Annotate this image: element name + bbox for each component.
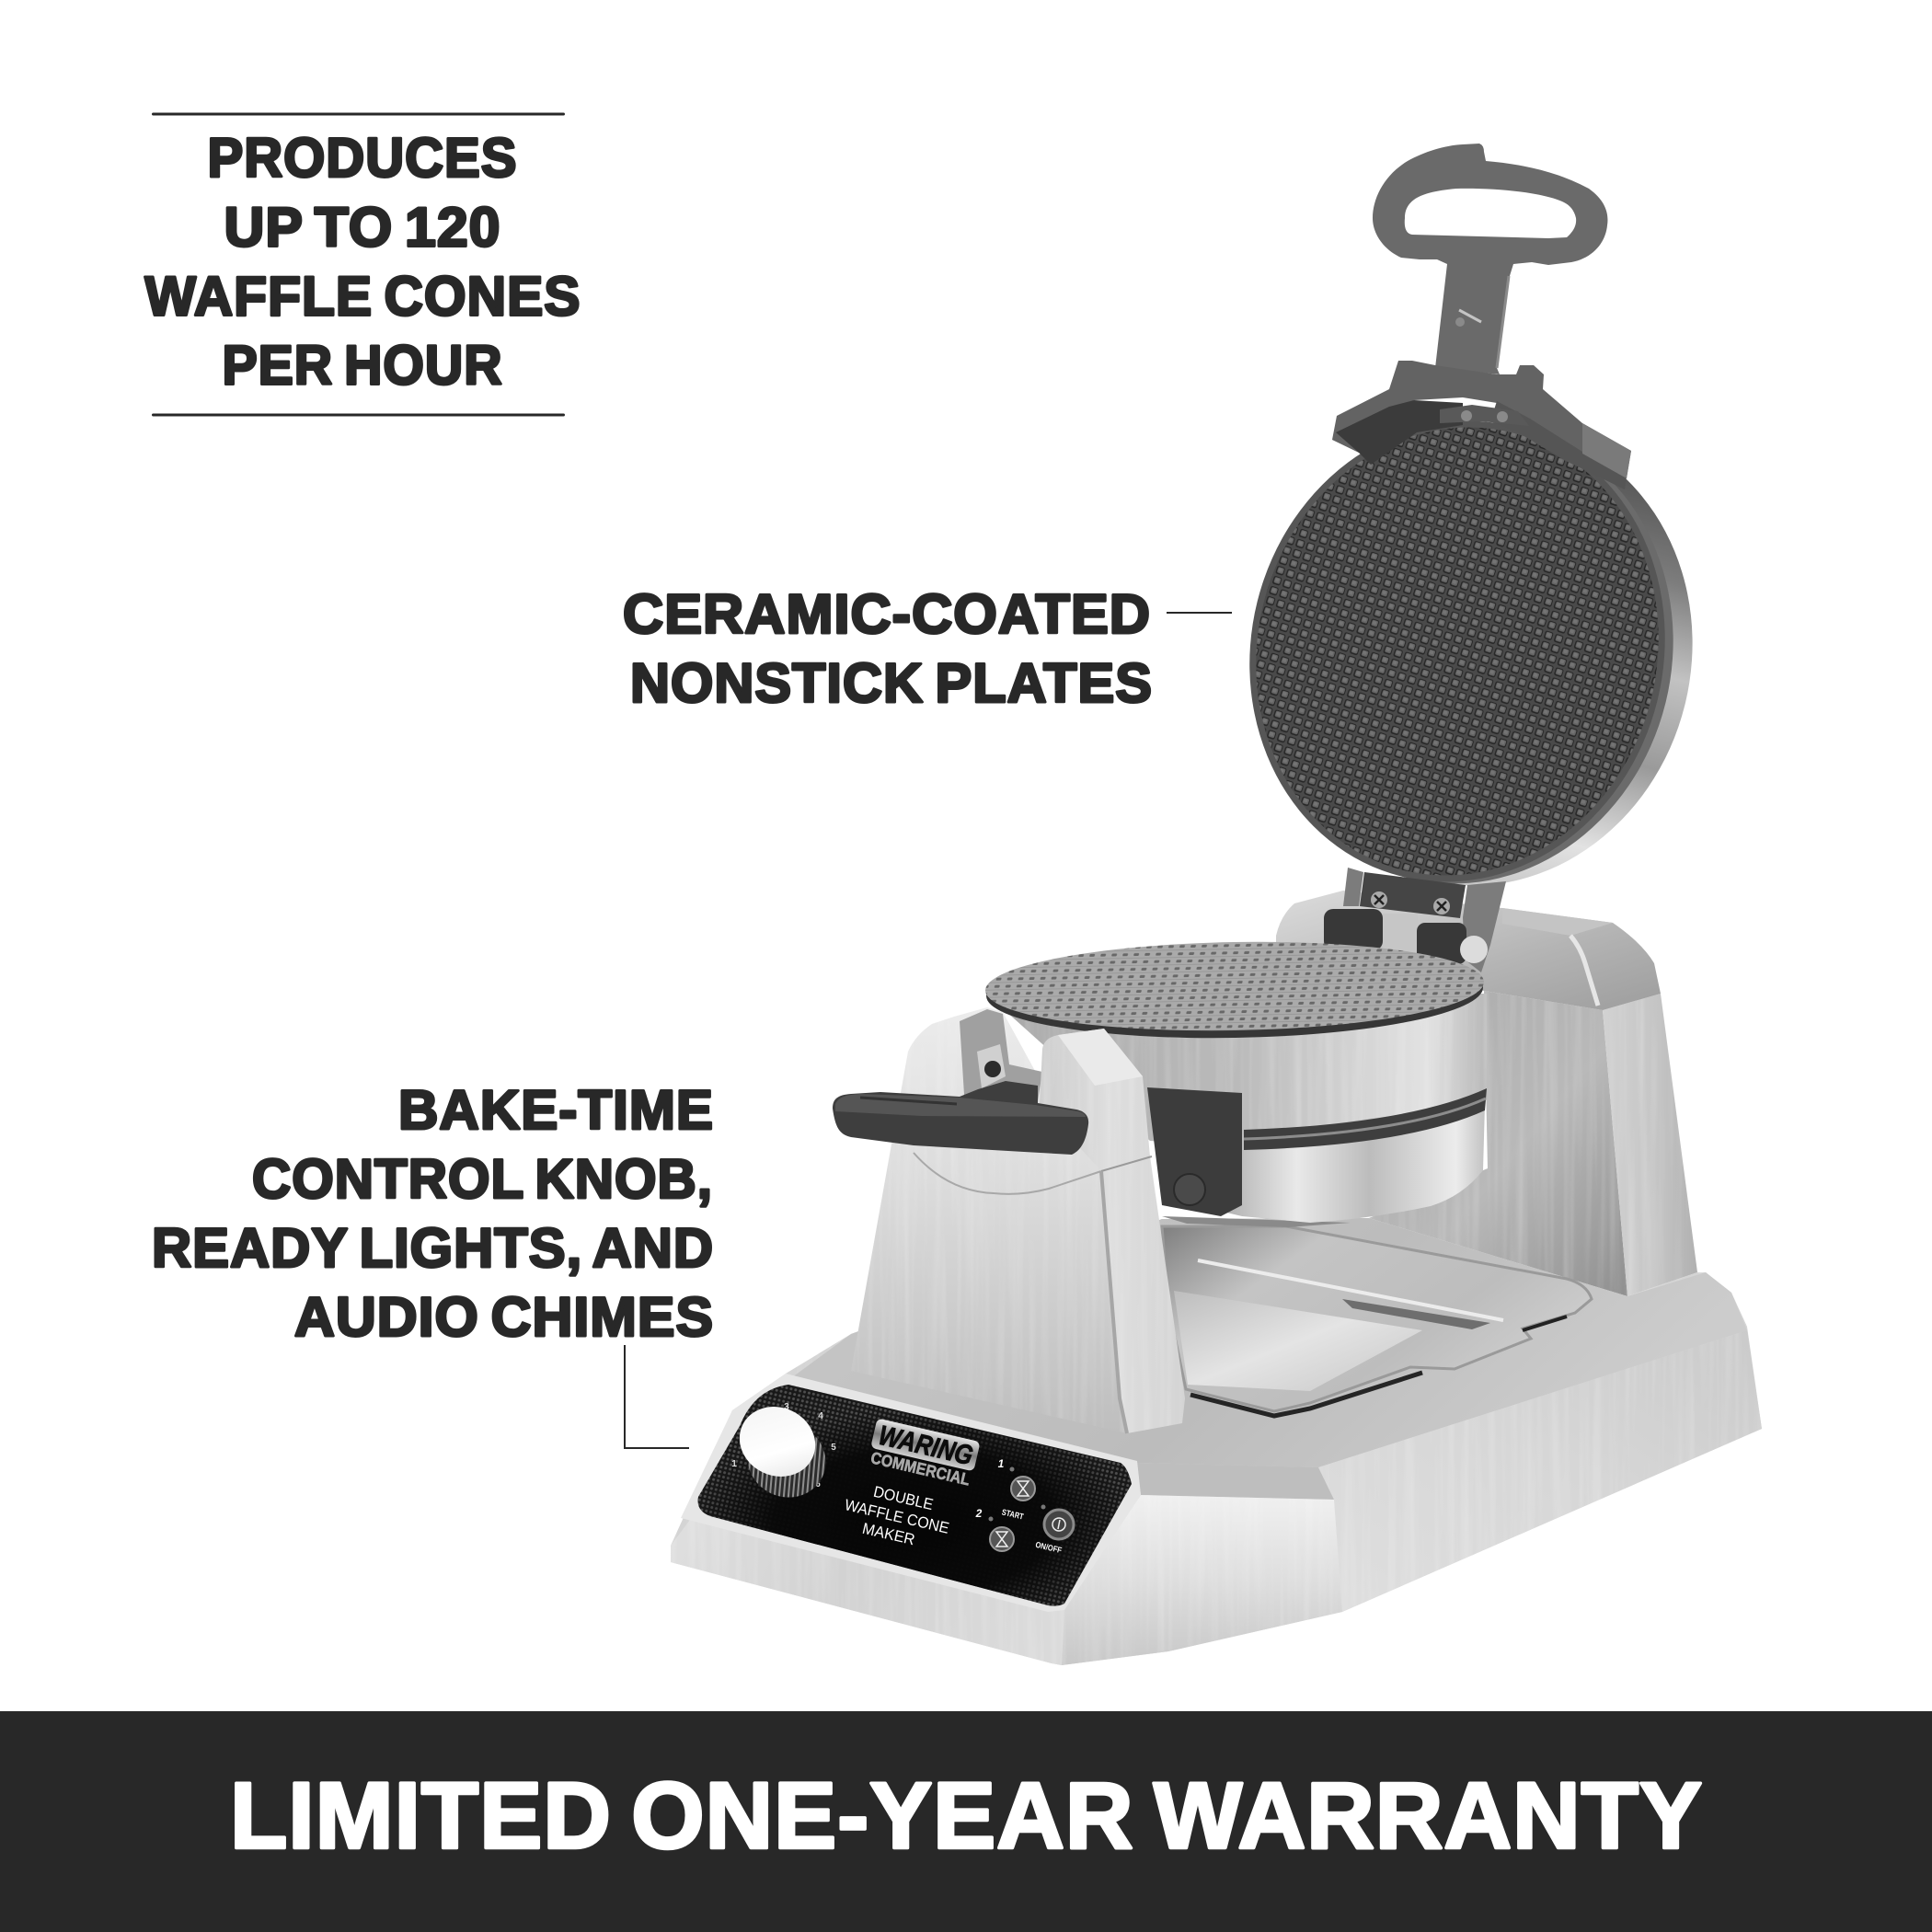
callout: nonstick plates: NONSTICK PLATES: [630, 652, 1153, 714]
base: [671, 1218, 1762, 1665]
buttons and ready lights: 1: [998, 1457, 1005, 1470]
product name: [843, 1483, 951, 1548]
buttons and ready lights: START: [1001, 1507, 1025, 1522]
dial numbers: 2: [748, 1420, 753, 1431]
upper plate shell: [1225, 380, 1741, 930]
warranty banner: LIMITED ONE-YEAR WARRANTY: [230, 1763, 1703, 1868]
callout: nonstick plates: [623, 583, 1232, 714]
dial numbers: [731, 1402, 836, 1489]
dark side block: [1147, 1087, 1242, 1216]
callout: production rate: PER HOUR: [223, 335, 502, 396]
dial numbers: 3: [784, 1402, 789, 1412]
buttons and ready lights: 2: [975, 1507, 983, 1520]
drip tray: [1162, 1226, 1592, 1416]
callout: control knob: AUDIO CHIMES: [294, 1286, 714, 1348]
upper lid handle: [1373, 144, 1607, 374]
callout: production rate: UP TO 120: [224, 197, 500, 258]
brand logo: WARING: [876, 1420, 976, 1471]
callout: control knob: [152, 1079, 714, 1448]
callout: production rate: WAFFLE CONES: [145, 265, 581, 328]
warranty banner: [0, 1711, 1932, 1932]
buttons and ready lights: [975, 1457, 1074, 1555]
dial numbers: 6: [815, 1479, 821, 1489]
rear tower: [1276, 891, 1697, 1296]
shell inner rim: [1208, 378, 1721, 928]
callout: production rate: PRODUCES: [208, 127, 517, 189]
product name: DOUBLE: [872, 1483, 935, 1513]
control panel: [698, 1385, 1132, 1606]
front tower: [851, 1007, 1185, 1433]
brand logo: COMMERCIAL: [869, 1448, 972, 1489]
waffle cone maker product illustration: [671, 144, 1762, 1665]
callout: production rate: [145, 112, 581, 416]
brand logo: [867, 1418, 981, 1489]
lower waffle plate: [984, 937, 1485, 1042]
product name: MAKER: [860, 1520, 916, 1548]
dial numbers: 4: [818, 1411, 823, 1421]
cylinder body: [986, 994, 1487, 1227]
callout: nonstick plates: CERAMIC-COATED: [623, 583, 1151, 645]
time knob: [728, 1395, 838, 1510]
lid bracket: [1332, 361, 1631, 489]
callout: control knob: CONTROL KNOB,: [252, 1148, 713, 1210]
front dark handle: [833, 1081, 1088, 1155]
callout: control knob: BAKE-TIME: [398, 1079, 714, 1141]
upper ceramic plate: [1202, 376, 1713, 926]
product name: WAFFLE CONE: [843, 1496, 951, 1537]
dial numbers: 5: [831, 1443, 836, 1453]
dial numbers: 1: [731, 1459, 737, 1469]
buttons and ready lights: ON/OFF: [1035, 1540, 1063, 1555]
callout: control knob: READY LIGHTS, AND: [152, 1217, 714, 1279]
hinges: [1324, 868, 1506, 972]
